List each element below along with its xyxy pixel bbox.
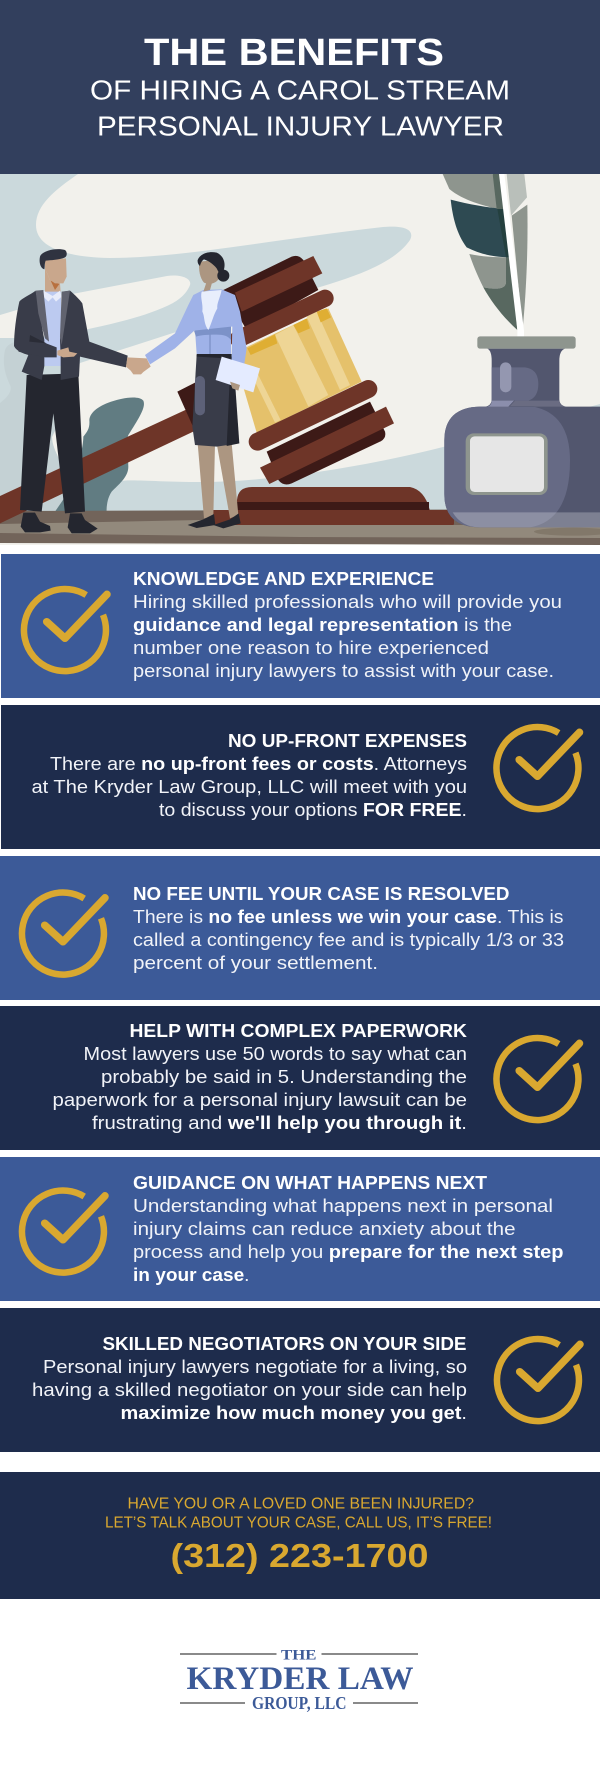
floor	[0, 509, 600, 545]
benefit text: number one reason to hire experienced	[133, 638, 489, 658]
panel: guidance on what happens next	[0, 1157, 600, 1301]
benefit text: paperwork for a personal injury lawsuit can be	[52, 1090, 467, 1110]
logo: The Kryder Law Group, LLC	[180, 1648, 418, 1713]
subtitle line one: OF HIRING A CAROL STREAM	[90, 74, 510, 106]
handshake	[126, 357, 151, 374]
illustration: lawyers shaking hands with gavel and ink bottle	[0, 174, 600, 545]
icon: gold check circle	[497, 1339, 580, 1421]
panel: no fee until resolved	[0, 856, 600, 1000]
benefit text: percent of your settlement.	[133, 953, 378, 973]
logo: The Kryder Law Group, LLC: KRYDER LAW	[186, 1661, 414, 1697]
benefit text: SKILLED NEGOTIATORS ON YOUR SIDE	[102, 1334, 466, 1354]
benefit text: Understanding what happens next in personal	[133, 1196, 553, 1216]
gavel head	[223, 256, 394, 484]
plant	[55, 397, 144, 512]
man in suit	[14, 249, 128, 533]
icon: gold check circle	[496, 727, 580, 809]
benefit text: in your case .	[133, 1265, 250, 1285]
benefit text: to discuss your options FOR FREE .	[159, 800, 467, 820]
woman in blue blouse	[145, 252, 260, 528]
panel: header title	[0, 0, 600, 174]
benefit text	[133, 1173, 564, 1285]
benefit text: probably be said in 5. Understanding the	[101, 1067, 467, 1087]
panel: knowledge and experience	[1, 554, 600, 698]
benefit text: injury claims can reduce anxiety about the	[133, 1219, 516, 1239]
panel: call to action	[0, 1472, 600, 1599]
benefit text: guidance and legal representation is the	[133, 615, 512, 635]
call to action text	[105, 1496, 492, 1532]
icon: gold check circle	[24, 589, 107, 671]
benefit text: KNOWLEDGE AND EXPERIENCE	[133, 569, 434, 589]
ink bottle	[444, 336, 600, 536]
benefit text: HELP WITH COMPLEX PAPERWORK	[130, 1021, 467, 1041]
benefit text: GUIDANCE ON WHAT HAPPENS NEXT	[133, 1173, 487, 1193]
benefit text	[32, 1334, 467, 1423]
call to action text: HAVE YOU OR A LOVED ONE BEEN INJURED?	[128, 1496, 474, 1512]
call to action text: LET’S TALK ABOUT YOUR CASE, CALL US, IT’S FREE!	[105, 1514, 492, 1532]
benefit text: Hiring skilled professionals who will provide you	[133, 592, 562, 612]
benefit text: process and help you prepare for the next step	[133, 1242, 564, 1262]
icon: gold check circle	[496, 1038, 580, 1120]
benefit text: Personal injury lawyers negotiate for a living, so	[43, 1357, 467, 1377]
benefit text: frustrating and we'll help you through it .	[92, 1113, 467, 1133]
logo: The Kryder Law Group, LLC: THE	[281, 1648, 316, 1664]
benefit text: having a skilled negotiator on your side can help	[32, 1380, 467, 1400]
benefit text: personal injury lawyers to assist with your case.	[133, 661, 554, 681]
icon: gold check circle	[22, 893, 105, 975]
benefit text: maximize how much money you get .	[120, 1403, 467, 1423]
benefit text: called a contingency fee and is typically 1/3 or 33	[133, 930, 564, 950]
gavel handle	[0, 383, 203, 523]
benefit text: NO FEE UNTIL YOUR CASE IS RESOLVED	[133, 884, 510, 904]
panel: no up-front expenses	[1, 705, 600, 849]
background swooshes	[0, 174, 600, 526]
benefit text	[32, 731, 467, 820]
benefit text: at The Kryder Law Group, LLC will meet with you	[32, 777, 467, 797]
benefit text	[52, 1021, 467, 1133]
panel: help with complex paperwork	[0, 1006, 600, 1150]
gavel sound block	[213, 487, 454, 525]
logo: The Kryder Law Group, LLC: GROUP, LLC	[252, 1693, 346, 1713]
phone number: (312) 223-1700	[170, 1537, 428, 1574]
benefit text: Most lawyers use 50 words to say what can	[84, 1044, 467, 1064]
heading: the benefits: THE BENEFITS	[144, 32, 444, 74]
subtitle line two: PERSONAL INJURY LAWYER	[97, 110, 504, 142]
panel: skilled negotiators	[0, 1308, 600, 1452]
benefit text: There is no fee unless we win your case . This is	[133, 907, 564, 927]
benefit text	[133, 569, 562, 681]
icon: gold check circle	[22, 1191, 105, 1273]
benefit text: There are no up-front fees or costs . Attorneys	[50, 754, 467, 774]
benefit text: NO UP-FRONT EXPENSES	[228, 731, 467, 751]
quill feather	[443, 174, 528, 337]
benefit text	[133, 884, 564, 973]
